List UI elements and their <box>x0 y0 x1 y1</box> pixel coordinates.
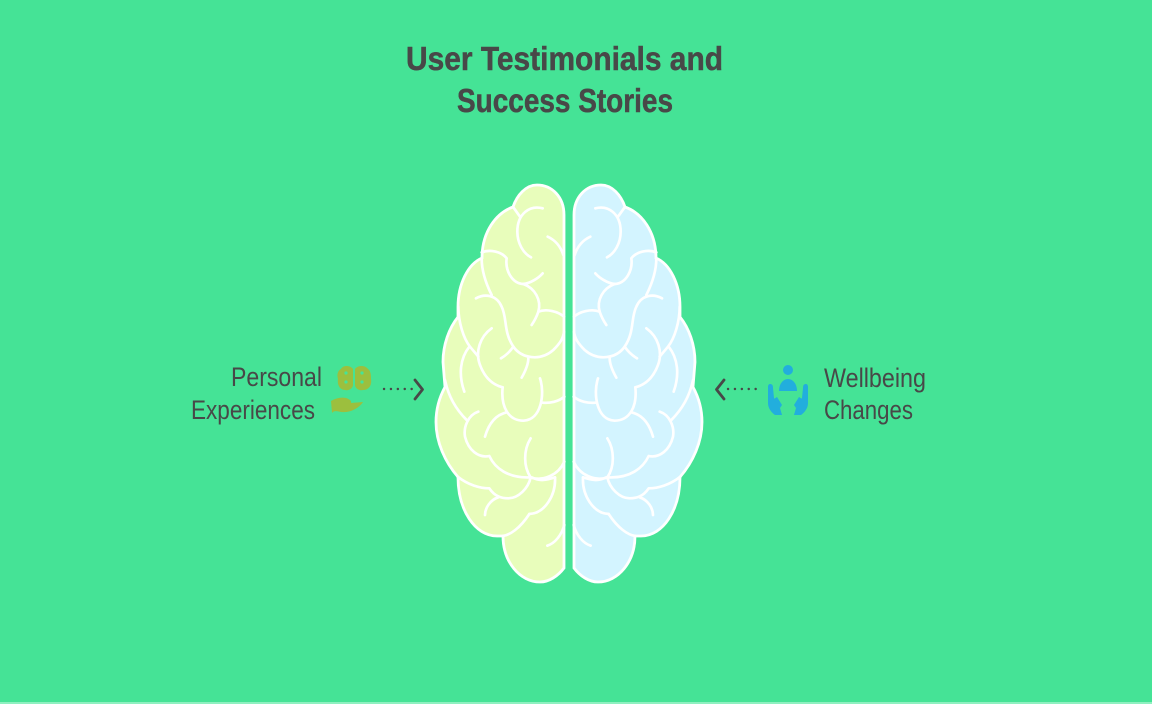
arrow: wellbeing changes to brain <box>716 380 756 399</box>
icon: brain in hand <box>331 366 371 413</box>
brain right hemisphere <box>574 185 702 582</box>
title: User Testimonials and <box>406 40 723 77</box>
label: personal experiences: Personal <box>231 362 322 392</box>
title <box>406 40 723 119</box>
label: personal experiences: Experiences <box>191 395 315 425</box>
label: wellbeing changes: Changes <box>824 395 913 425</box>
label: personal experiences <box>191 362 322 425</box>
icon: person in caring hands <box>768 365 808 415</box>
arrow: personal experiences to brain <box>384 380 422 399</box>
title: Success Stories <box>457 82 673 119</box>
label: wellbeing changes: Wellbeing <box>824 363 926 393</box>
label: wellbeing changes <box>824 363 926 425</box>
brain left hemisphere <box>436 185 564 582</box>
